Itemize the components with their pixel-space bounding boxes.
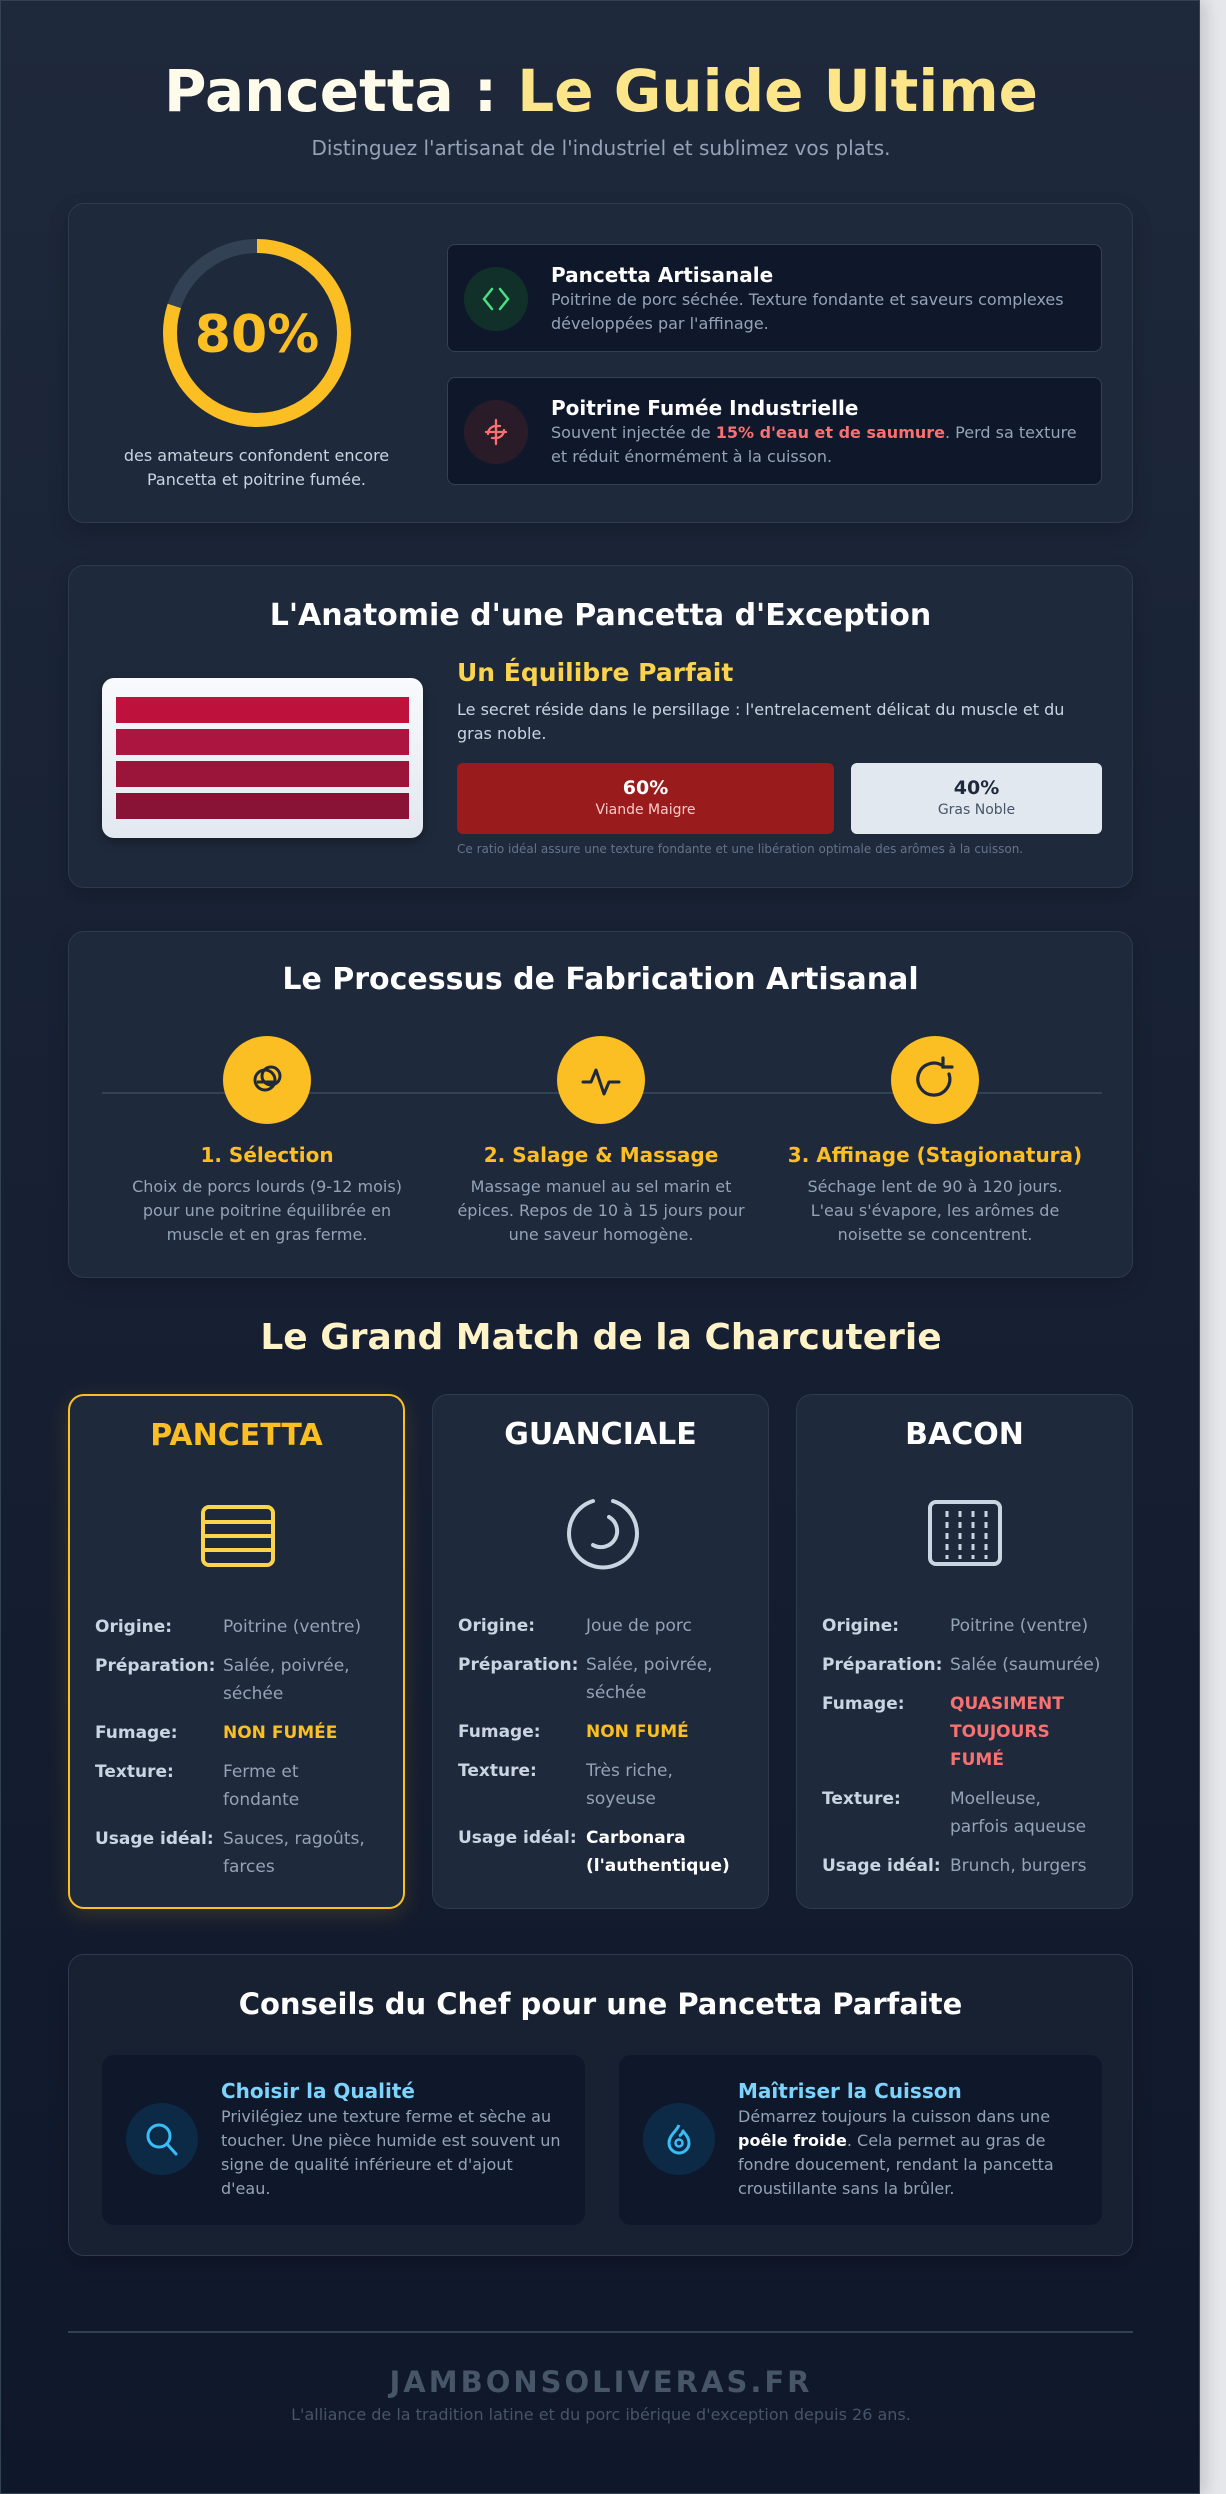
bar: 60% viande bbox=[457, 763, 834, 834]
card: poitrine industrielle: Souvent injectée de 15% d'eau et de saumure. Perd sa texture et réduit énormément à la cuisson. bbox=[551, 423, 1077, 466]
donut chart 80% bbox=[163, 239, 351, 427]
bar: 60% viande: 60% bbox=[623, 777, 668, 799]
data rows bbox=[95, 1617, 365, 1877]
data rows: Texture: bbox=[95, 1762, 174, 1782]
data rows: Salée (saumurée) bbox=[950, 1655, 1100, 1675]
data rows: QUASIMENT bbox=[950, 1694, 1064, 1714]
data rows: Moelleuse, bbox=[950, 1789, 1041, 1809]
step 1 text bbox=[132, 1143, 402, 1244]
icon: circle swirl bbox=[567, 1499, 639, 1570]
title: Pancetta : Le Guide Ultime bbox=[164, 57, 1038, 125]
footer tagline: L'alliance de la tradition latine et du porc ibérique d'exception depuis 26 ans. bbox=[291, 2405, 911, 2424]
panel: anatomie bbox=[68, 565, 1133, 888]
data rows: Sauces, ragoûts, farces bbox=[223, 1829, 365, 1877]
tip: cuisson bbox=[619, 2055, 1102, 2225]
bar: 40% gras: Gras Noble bbox=[938, 802, 1015, 818]
data rows: Préparation: bbox=[95, 1656, 215, 1676]
card: pancetta bbox=[68, 1394, 405, 1909]
step 2 text: 2. Salage & Massage bbox=[484, 1143, 718, 1167]
data rows: Usage idéal: bbox=[458, 1828, 577, 1848]
card: bacon: BACON bbox=[905, 1417, 1024, 1452]
donut caption bbox=[124, 446, 389, 489]
footer brand: JAMBONSOLIVERAS.FR bbox=[390, 2365, 812, 2399]
heading: L'Anatomie d'une Pancetta d'Exception bbox=[270, 598, 931, 633]
icon: code brackets bbox=[464, 267, 528, 331]
card: guanciale: GUANCIALE bbox=[504, 1417, 697, 1452]
icon: step 2 bbox=[557, 1036, 645, 1124]
data rows: Préparation: bbox=[822, 1655, 942, 1675]
step 3 text bbox=[788, 1143, 1082, 1244]
data rows: parfois aqueuse bbox=[950, 1817, 1086, 1837]
data rows: Préparation: bbox=[458, 1655, 578, 1675]
bar: 40% gras bbox=[851, 763, 1102, 834]
icon: flame bbox=[643, 2103, 715, 2175]
step 3 text: 3. Affinage (Stagionatura) bbox=[788, 1143, 1082, 1167]
heading: Conseils du Chef pour une Pancetta Parfaite bbox=[239, 1987, 962, 2021]
heading: Le Processus de Fabrication Artisanal bbox=[282, 962, 919, 997]
data rows: Origine: bbox=[95, 1617, 172, 1637]
card: guanciale bbox=[432, 1394, 769, 1909]
data rows: FUMÉ bbox=[950, 1750, 1004, 1770]
data rows bbox=[458, 1616, 730, 1876]
data rows: Poitrine (ventre) bbox=[950, 1616, 1088, 1636]
card: poitrine industrielle: Poitrine Fumée Industrielle bbox=[551, 396, 858, 420]
icon: stacked layers bbox=[201, 1505, 275, 1567]
data rows: Usage idéal: bbox=[822, 1856, 941, 1876]
data rows: Salée, poivrée, séchée bbox=[586, 1655, 713, 1703]
subheading: Un Équilibre Parfait bbox=[457, 658, 733, 687]
data rows: Fumage: bbox=[95, 1723, 178, 1743]
description: Le secret réside dans le persillage : l'entrelacement délicat du muscle et du gras noble. bbox=[457, 700, 1064, 743]
panel: conseils bbox=[68, 1954, 1133, 2256]
illustration: pancetta slab bbox=[102, 678, 423, 838]
card: poitrine industrielle bbox=[447, 377, 1102, 485]
bar: 40% gras: 40% bbox=[954, 777, 999, 799]
data rows: Fumage: bbox=[458, 1722, 541, 1742]
donut caption: des amateurs confondent encore bbox=[124, 446, 389, 465]
data rows: Carbonara (l'authentique) bbox=[586, 1828, 730, 1876]
data rows: Ferme et bbox=[223, 1762, 299, 1782]
data rows: Texture: bbox=[458, 1761, 537, 1781]
panel: statistic bbox=[68, 203, 1133, 523]
card: pancetta: PANCETTA bbox=[150, 1418, 323, 1453]
step 2 text: Massage manuel au sel marin et épices. Repos de 10 à 15 jours pour une saveur homogène. bbox=[457, 1177, 745, 1244]
tip: qualité: Choisir la Qualité bbox=[221, 2079, 415, 2103]
icon: step 3 bbox=[891, 1036, 979, 1124]
step 3 text: Séchage lent de 90 à 120 jours. L'eau s'évapore, les arômes de noisette se concentrent. bbox=[807, 1177, 1063, 1244]
data rows: TOUJOURS bbox=[950, 1722, 1050, 1742]
panel: processus bbox=[68, 931, 1133, 1278]
data rows: Joue de porc bbox=[586, 1616, 692, 1636]
step 2 text bbox=[457, 1143, 745, 1244]
icon: step 1 bbox=[223, 1036, 311, 1124]
data rows: Origine: bbox=[458, 1616, 535, 1636]
data rows: soyeuse bbox=[586, 1789, 656, 1809]
heading: grand match: Le Grand Match de la Charcuterie bbox=[260, 1317, 942, 1358]
data rows bbox=[822, 1616, 1100, 1876]
card: bacon bbox=[796, 1394, 1133, 1909]
footnote: Ce ratio idéal assure une texture fondante et une libération optimale des arômes à la cuisson. bbox=[457, 842, 1023, 856]
data rows: Texture: bbox=[822, 1789, 901, 1809]
data rows: Poitrine (ventre) bbox=[223, 1617, 361, 1637]
data rows: Fumage: bbox=[822, 1694, 905, 1714]
data rows: NON FUMÉ bbox=[586, 1722, 689, 1742]
data rows: fondante bbox=[223, 1790, 299, 1810]
tip: qualité bbox=[102, 2055, 585, 2225]
icon: magnifier bbox=[126, 2103, 198, 2175]
data rows: Usage idéal: bbox=[95, 1829, 214, 1849]
donut chart 80%: 80% bbox=[195, 305, 319, 365]
subtitle: Distinguez l'artisanat de l'industriel et sublimez vos plats. bbox=[311, 136, 891, 160]
data rows: NON FUMÉE bbox=[223, 1723, 337, 1743]
icon: broken link bbox=[464, 400, 528, 464]
tip: cuisson: Maîtriser la Cuisson bbox=[738, 2079, 962, 2103]
data rows: Salée, poivrée, séchée bbox=[223, 1656, 350, 1704]
data rows: Brunch, burgers bbox=[950, 1856, 1086, 1876]
card: pancetta artisanale: Poitrine de porc séchée. Texture fondante et saveurs complexes développées par l'affinage. bbox=[551, 290, 1064, 333]
step 1 text: 1. Sélection bbox=[200, 1143, 334, 1167]
bar: 60% viande: Viande Maigre bbox=[595, 802, 696, 818]
tip: qualité: Privilégiez une texture ferme et sèche au toucher. Une pièce humide est souvent un signe de qualité inférieure et d'ajout d'eau. bbox=[221, 2107, 561, 2198]
donut caption: Pancetta et poitrine fumée. bbox=[147, 470, 366, 489]
step 1 text: Choix de porcs lourds (9-12 mois) pour une poitrine équilibrée en muscle et en gras ferme. bbox=[132, 1177, 402, 1244]
data rows: Très riche, bbox=[586, 1761, 673, 1781]
tip: cuisson: Démarrez toujours la cuisson dans une poêle froide. Cela permet au gras de fondre doucement, rendant la pancetta croustillante sans la brûler. bbox=[738, 2107, 1054, 2198]
card: pancetta artisanale bbox=[447, 244, 1102, 352]
card: pancetta artisanale: Pancetta Artisanale bbox=[551, 263, 773, 287]
data rows: Origine: bbox=[822, 1616, 899, 1636]
icon: grid bbox=[928, 1500, 1002, 1566]
